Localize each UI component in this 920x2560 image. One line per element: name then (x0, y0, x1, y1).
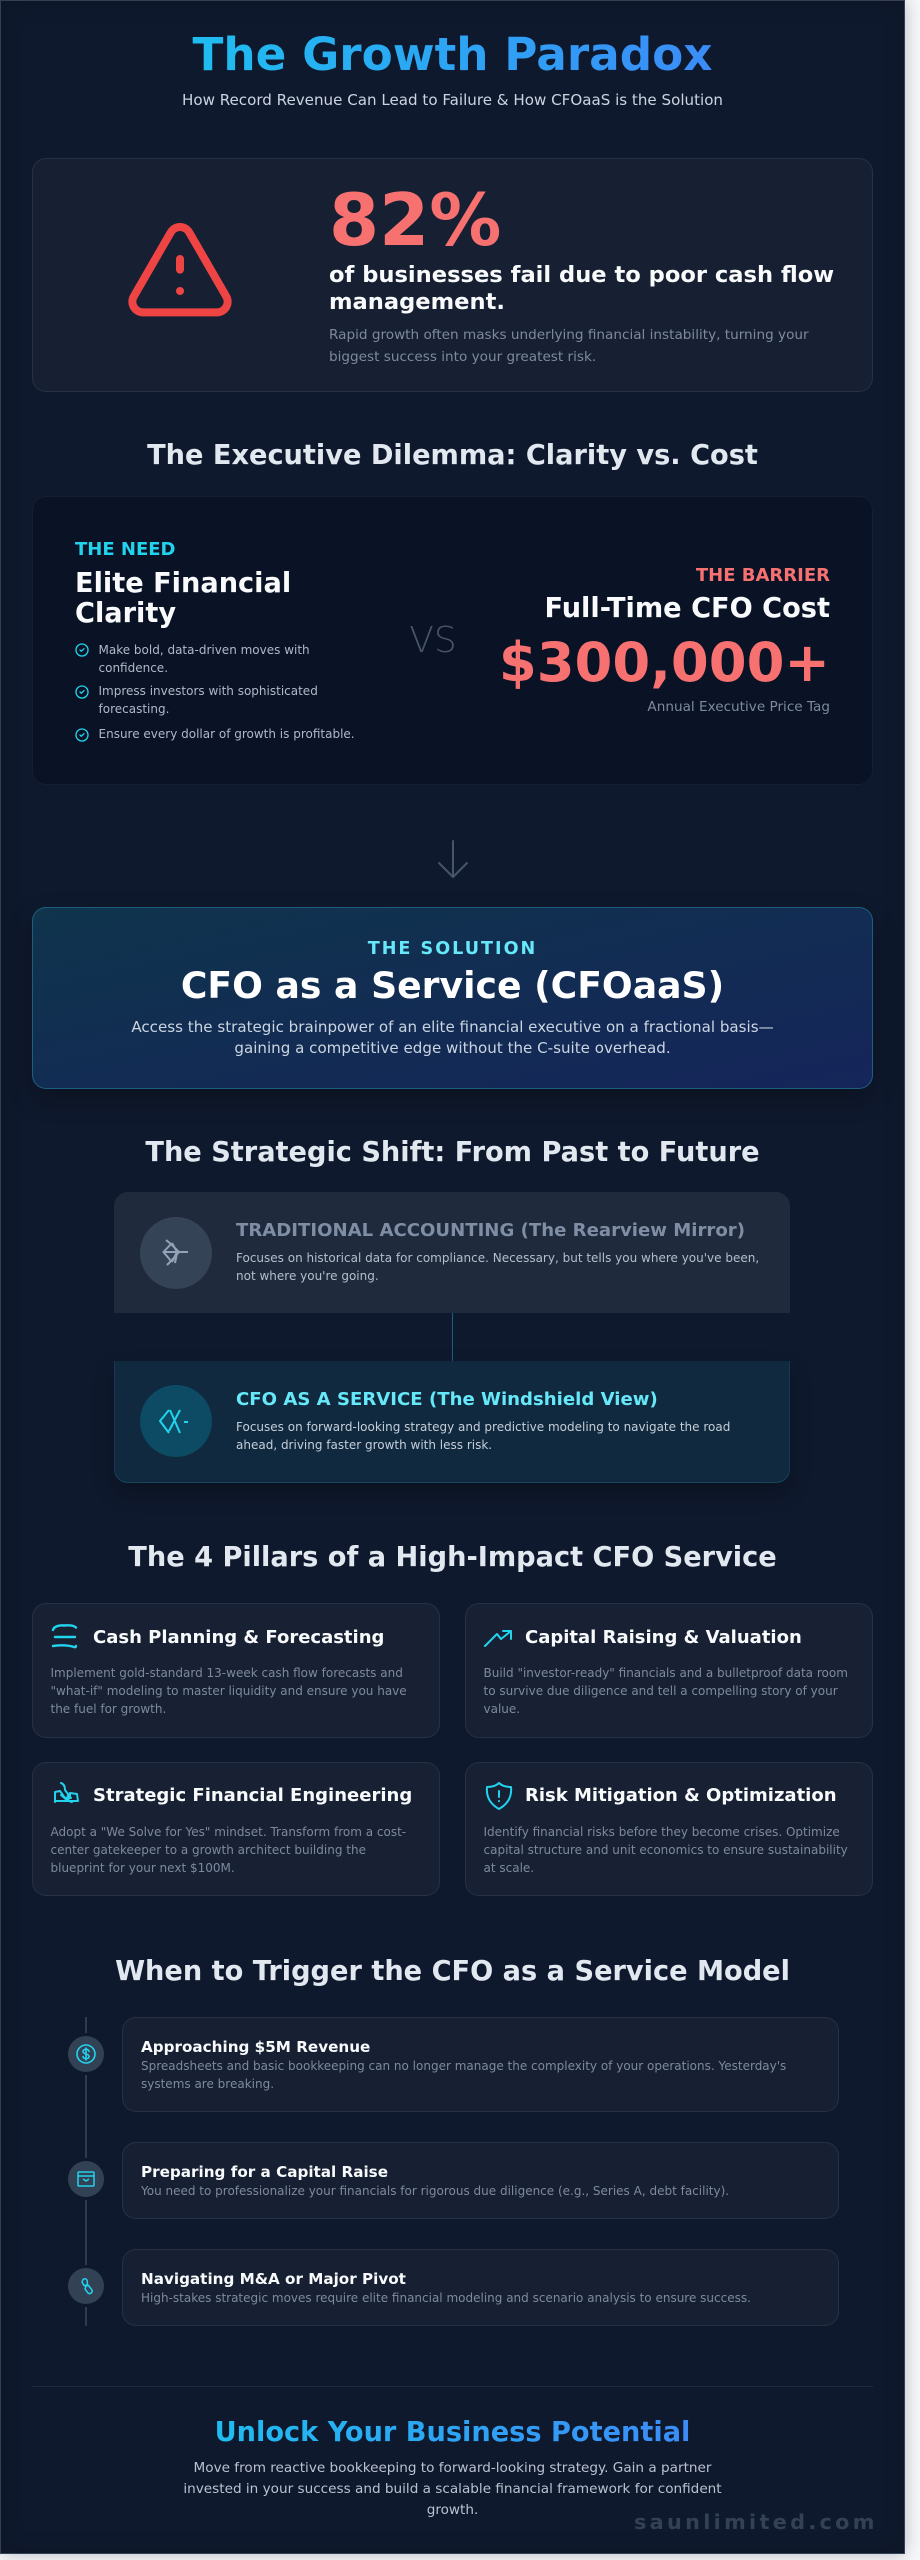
supporting text (329, 327, 809, 365)
icon: mirror glyph (162, 1239, 188, 1266)
barrier price: $300,000+ (499, 631, 830, 694)
description: traditional accounting (236, 1251, 759, 1283)
barrier label: THE BARRIER (696, 565, 830, 586)
description: strategic engineering: center gatekeeper to a growth architect building the (50, 1843, 366, 1857)
trigger 3 title: Navigating M&A or Major Pivot (141, 2270, 406, 2288)
need point 1: confidence. (98, 661, 168, 675)
description: strategic engineering: Adopt a "We Solve for Yes" mindset. Transform from a cost- (50, 1825, 406, 1839)
description: traditional accounting: not where you're going. (236, 1269, 379, 1283)
need heading: Elite Financial (75, 568, 291, 599)
panel: trigger 2 (122, 2142, 839, 2219)
trigger 1 title: Approaching $5M Revenue (141, 2038, 370, 2056)
trigger 1 text (141, 2059, 786, 2091)
heading: cash planning: Cash Planning & Forecasting (93, 1627, 384, 1648)
supporting text: Rapid growth often masks underlying financial instability, turning your (329, 327, 809, 343)
need point 2 (98, 684, 318, 716)
heading: traditional accounting: TRADITIONAL ACCOUNTING (The Rearview Mirror) (236, 1220, 745, 1241)
statistic description (329, 262, 834, 315)
description: capital raising: value. (484, 1702, 520, 1716)
heading: CFO as a service: CFO AS A SERVICE (The Windshield View) (236, 1389, 658, 1410)
panel: 82% statistic (32, 158, 873, 392)
connector between panels (452, 1313, 453, 1361)
timeline node: link (68, 2268, 104, 2304)
description: CFO as a service (236, 1420, 730, 1452)
panel: trigger 1 (122, 2017, 839, 2112)
price caption: Annual Executive Price Tag (647, 699, 830, 715)
trigger 2 text: You need to professionalize your financials for rigorous due diligence (e.g., Series A, debt facility). (141, 2184, 729, 2198)
panel: risk mitigation (465, 1762, 873, 1896)
panel: the solution (32, 907, 873, 1089)
barrier heading: Full-Time CFO Cost (544, 593, 830, 624)
need heading (75, 568, 291, 629)
description: cash planning (50, 1666, 407, 1716)
heading: when to trigger: When to Trigger the CFO as a Service Model (115, 1956, 790, 1987)
call to action text: Move from reactive bookkeeping to forward-looking strategy. Gain a partner (194, 2460, 711, 2476)
statistic description: of businesses fail due to poor cash flow (329, 262, 834, 288)
timeline node: dollar (68, 2036, 104, 2072)
icon: chain link (81, 2278, 93, 2294)
call to action text: invested in your success and build a scalable financial framework for confident (183, 2481, 722, 2497)
check icon 1 (75, 643, 89, 657)
need heading: Clarity (75, 598, 176, 629)
description: risk mitigation: Identify financial risks before they become crises. Optimize (484, 1825, 840, 1839)
icon: warning triangle (128, 223, 232, 316)
description: capital raising (484, 1666, 848, 1716)
heading: strategic engineering: Strategic Financial Engineering (93, 1785, 412, 1806)
trigger 2 title: Preparing for a Capital Raise (141, 2163, 388, 2181)
heading: capital raising: Capital Raising & Valuation (525, 1627, 802, 1648)
arrow: down to solution (438, 840, 468, 878)
check icon 2 (75, 685, 89, 699)
heading: risk mitigation: Risk Mitigation & Optimization (525, 1785, 837, 1806)
description: strategic engineering (50, 1825, 406, 1875)
trigger 3 text: High-stakes strategic moves require elite financial modeling and scenario analysis to ensure success. (141, 2291, 751, 2305)
description: cash planning: the fuel for growth. (50, 1702, 166, 1716)
VS divider text: VS (409, 620, 457, 661)
solution label: THE SOLUTION (368, 939, 537, 959)
need point 1 (98, 643, 310, 675)
title: The Growth Paradox (192, 28, 712, 81)
panel: capital raising (465, 1603, 873, 1738)
description: capital raising: Build "investor-ready" financials and a bulletproof data room (484, 1666, 848, 1680)
solution description: gaining a competitive edge without the C-suite overhead. (234, 1038, 671, 1056)
need point 3: Ensure every dollar of growth is profitable. (98, 727, 355, 741)
panel: trigger 3 (122, 2249, 839, 2326)
check icon 3 (75, 728, 89, 742)
statistic: 82%: 82% (329, 178, 501, 262)
description: cash planning: Implement gold-standard 13-week cash flow forecasts and (50, 1666, 403, 1680)
panel: cash planning (32, 1603, 440, 1738)
subtitle: How Record Revenue Can Lead to Failure & How CFOaaS is the Solution (182, 91, 723, 109)
description: risk mitigation (484, 1825, 848, 1875)
description: risk mitigation: capital structure and unit economics to ensure sustainability (484, 1843, 848, 1857)
heading: strategic shift: The Strategic Shift: From Past to Future (145, 1137, 760, 1168)
statistic description: management. (329, 289, 505, 315)
need point 1: Make bold, data-driven moves with (98, 643, 310, 657)
solution description (131, 1018, 774, 1056)
solution heading: CFO as a Service (CFOaaS) (181, 964, 724, 1007)
solution description: Access the strategic brainpower of an elite financial executive on a fractional basis— (131, 1018, 774, 1036)
timeline node: briefcase (68, 2161, 104, 2197)
trigger 1 text: Spreadsheets and basic bookkeeping can no longer manage the complexity of your operations. Yesterday's (141, 2059, 786, 2073)
need point 2: Impress investors with sophisticated (98, 684, 318, 698)
icon: dollar coin (76, 2044, 96, 2064)
icon: trending up (484, 1630, 512, 1647)
call to action text (183, 2460, 722, 2518)
trigger 1 text: systems are breaking. (141, 2077, 274, 2091)
call to action (183, 2417, 722, 2518)
panel: traditional accounting (114, 1192, 790, 1313)
heading: four pillars: The 4 Pillars of a High-Impact CFO Service (128, 1542, 777, 1573)
icon: box (77, 2171, 95, 2187)
icon: engineering (54, 1782, 79, 1803)
panel: CFO as a service (114, 1361, 790, 1483)
description: CFO as a service: Focuses on forward-looking strategy and predictive modeling to navigate the road (236, 1420, 730, 1434)
icon circle: windshield (140, 1385, 212, 1457)
panel: strategic engineering (32, 1762, 440, 1896)
description: strategic engineering: blueprint for your next $100M. (50, 1861, 235, 1875)
call to action text: growth. (427, 2502, 478, 2518)
need label: THE NEED (75, 539, 176, 560)
description: risk mitigation: at scale. (484, 1861, 534, 1875)
description: traditional accounting: Focuses on historical data for compliance. Necessary, but tells you where you've been, (236, 1251, 759, 1265)
timeline (68, 2017, 104, 2326)
need point 2: forecasting. (98, 702, 169, 716)
supporting text: biggest success into your greatest risk. (329, 349, 596, 365)
icon: windshield glyph (158, 1409, 188, 1434)
icon circle: rearview mirror (140, 1217, 212, 1289)
call to action heading: Unlock Your Business Potential (215, 2417, 690, 2448)
icon: cash layers (52, 1624, 78, 1648)
description: cash planning: "what-if" modeling to master liquidity and ensure you have (50, 1684, 407, 1698)
icon: shield (486, 1782, 512, 1810)
watermark: saunlimited.com (634, 2510, 878, 2534)
panel: need vs barrier (32, 496, 873, 785)
description: CFO as a service: ahead, driving faster growth with less risk. (236, 1438, 492, 1452)
heading: executive dilemma: The Executive Dilemma: Clarity vs. Cost (147, 440, 758, 471)
description: capital raising: to survive due diligence and tell a compelling story of your (484, 1684, 838, 1698)
